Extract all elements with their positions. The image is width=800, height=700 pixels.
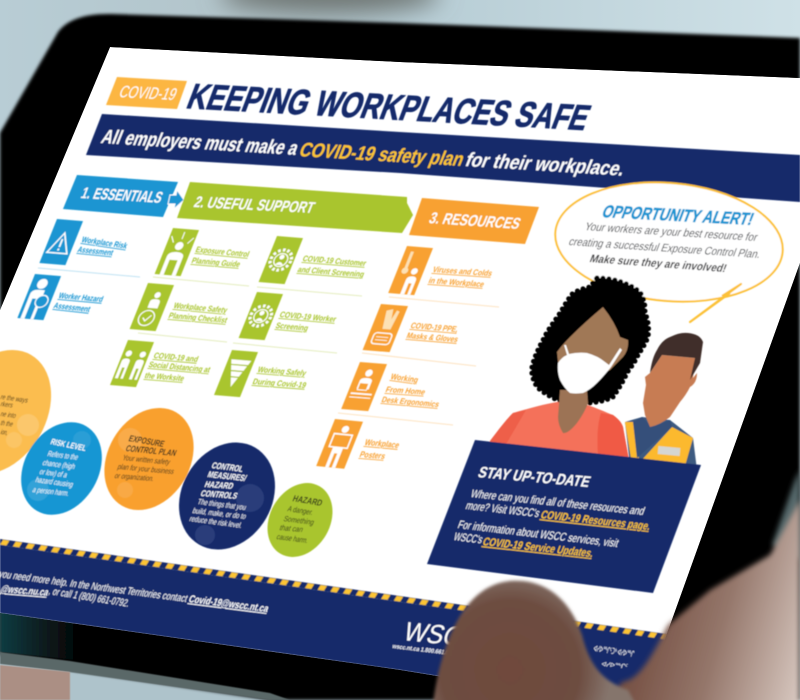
speech bubble: Your workers are your best resource for [583,221,759,244]
circle: exposure control plan: or organization. [113,471,156,483]
speech bubble: OPPORTUNITY ALERT! [600,202,757,229]
heading tag: COVID-19: COVID-19 [116,82,180,104]
item: workplace safety planning checklist: Workplace Safety [172,300,229,315]
icon: glove and mask [363,304,408,352]
circle: risk level: a person harm. [31,485,71,498]
circle: exposure control plan: CONTROL PLAN [124,443,178,458]
item: workplace risk assessment: Workplace Risk [80,234,129,251]
circle: hazard [266,482,334,558]
item: customer and client screening [259,236,369,284]
item: worker hazard assessment: Assessment [52,300,92,314]
icon: warning triangle [39,219,83,265]
item: customer and client screening: COVID-19 Customer [301,253,369,268]
icon: thermometer and person [388,246,433,295]
panel: stay up-to-date: COVID-19 Resources page. [539,509,652,533]
circle: control measures [178,442,276,550]
illustration: worker in vest [625,333,703,470]
panel: stay up-to-date: more? Visit WSCC's [464,500,541,520]
item: workplace safety planning checklist: Planning Checklist [167,310,229,325]
tablet reflection at lower left [0,612,75,660]
circle: risk level: Refers to the [46,449,80,462]
speech bubble [550,173,788,322]
item: customer and client screening: and Client Screening [296,264,366,279]
panel: stay up-to-date [427,440,701,593]
item: working from home desk ergonomics: From Home [384,384,427,397]
item: worker screening: Screening [274,320,310,333]
item: PPE masks and gloves: Masks & Gloves [405,330,460,344]
section header: useful support [177,182,413,233]
panel: stay up-to-date: Where can you find all of these resources and [469,488,646,518]
panel: stay up-to-date: WSCC's [452,531,484,546]
item: worker hazard assessment: Worker Hazard [57,290,105,304]
item: social distancing at the worksite [110,340,212,387]
item: social distancing at the worksite: COVID-19 and [152,350,200,364]
circle: control measures: The things that you [196,497,248,512]
item: social distancing at the worksite: Social Distancing at [147,359,212,374]
banner: COVID-19 safety plan [296,140,468,171]
item: exposure control planning guide: Planning Guide [190,255,242,269]
item: social distancing at the worksite: the Worksite [143,370,186,383]
item: worker hazard assessment [17,274,105,320]
icon: two people apart [110,340,154,387]
circle: control measures: HAZARD [203,479,235,491]
right hand and palm [600,500,800,700]
footer band: @wscc.nu.ca [0,584,50,599]
speech bubble: Make sure they are involved! [588,253,728,275]
illustration: woman in mask [488,278,649,460]
item: worker screening: COVID-19 Worker [278,309,339,324]
item: PPE masks and gloves: COVID-19 PPE, [409,320,460,334]
item: workplace risk assessment [39,219,129,265]
circle: control measures: CONTROL [210,460,245,474]
circle: risk level: hazard causing [34,475,75,489]
banner [86,114,800,202]
circle: control measures: reduce the risk level. [188,514,244,530]
circle: partial yellow definition: re the ways [0,392,30,405]
footer band: Covid-19@wscc.nt.ca [187,594,270,615]
item: working safely during covid-19: During Covid-19 [251,376,308,390]
item: workplace posters: Posters [358,449,387,461]
footer band [0,539,670,700]
item: workplace posters [316,419,401,469]
section header: resources: 3. RESOURCES [426,210,524,233]
circle: partial yellow definition [0,349,52,472]
circle: hazard: cause harm. [275,532,310,545]
circle: risk level: chance (high [41,458,77,471]
panel: stay up-to-date: COVID-19 Service Updates. [481,536,595,560]
section header: essentials [63,175,178,217]
item: viruses and colds in the workplace [388,246,494,295]
circle: risk level [20,421,103,516]
circle: control measures: MEASURES/ [206,469,248,483]
icon: inverted hierarchy funnel [214,350,258,397]
item: viruses and colds in the workplace: in the Workplace [427,275,486,289]
banner: All employers must make a [98,127,302,160]
tablet bottom edge highlight [0,652,290,700]
banner: for their workplace. [462,150,629,180]
footer band: you need more help. In the Northwest Territories contact [0,569,189,605]
item: working from home desk ergonomics: Desk Ergonomics [380,394,441,409]
icon: gear with worker [239,292,283,340]
item: working from home desk ergonomics [341,362,441,411]
circle: risk level: or low) of a [38,467,69,479]
icon: person holding poster [316,419,363,469]
circle: control measures: build, make, or do to [191,506,248,521]
footer band: WSCC [400,617,484,653]
circle: hazard: that can [278,523,305,534]
section header: resources [409,198,539,244]
item: workplace risk assessment: Assessment [76,244,115,257]
circle: hazard: Something [282,514,316,527]
footer band: ᐊᓯᐅᙱᑦ [600,661,629,671]
circle: hazard: A danger. [286,504,315,517]
item: PPE masks and gloves [363,304,460,352]
thumb [432,581,640,700]
item: workplace safety planning checklist [130,283,229,331]
right edge reflection [772,470,800,560]
item: exposure control planning guide [155,228,251,276]
footer band: , or call 1 (800) 661-0792. [47,586,131,610]
circle: hazard: HAZARD [291,493,325,508]
circle: exposure control plan [104,407,194,511]
panel: stay up-to-date: For information about WSCC services, visit [456,519,621,550]
icon: worker with hazard sign [17,274,61,320]
item: viruses and colds in the workplace: Viruses and Colds [431,264,494,278]
icon: person with check mark [130,283,174,331]
circle: exposure control plan: Your written safety [121,453,172,467]
icon: gear with person [259,236,303,284]
icon: person with arrows [155,228,199,276]
item: working safely during covid-19: Working Safely [256,364,308,378]
arrow: essentials to support [168,190,184,209]
speech bubble: creating a successful Exposure Control Plan. [567,236,762,261]
item: workplace posters: Workplace [363,437,401,450]
item: worker screening [239,292,339,340]
title: KEEPING WORKPLACES SAFE [182,76,596,138]
left hand finger [0,665,70,700]
item: working safely during covid-19 [214,350,308,397]
panel: stay up-to-date: STAY UP-TO-DATE [476,464,593,491]
heading tag: COVID-19 [106,77,187,109]
item: working from home desk ergonomics: Working [389,371,420,385]
circle: control measures: CONTROLS [199,488,239,501]
circle: risk level: RISK LEVEL [49,436,88,453]
circle: exposure control plan: EXPOSURE [127,433,166,449]
footer band: wscc.nt.ca 1.800.661.0792 [391,643,459,658]
section header: useful support: 2. USEFUL SUPPORT [191,194,318,217]
icon: person at desk [341,362,387,411]
circle: exposure control plan: plan for your business [116,462,176,476]
item: exposure control planning guide: Exposure Control [194,244,251,259]
section header: essentials: 1. ESSENTIALS [78,185,166,207]
footer band: ᐊᓯᐅᙱᑦᑐᒃ ᐊᓯᐅᙱ [592,644,635,659]
